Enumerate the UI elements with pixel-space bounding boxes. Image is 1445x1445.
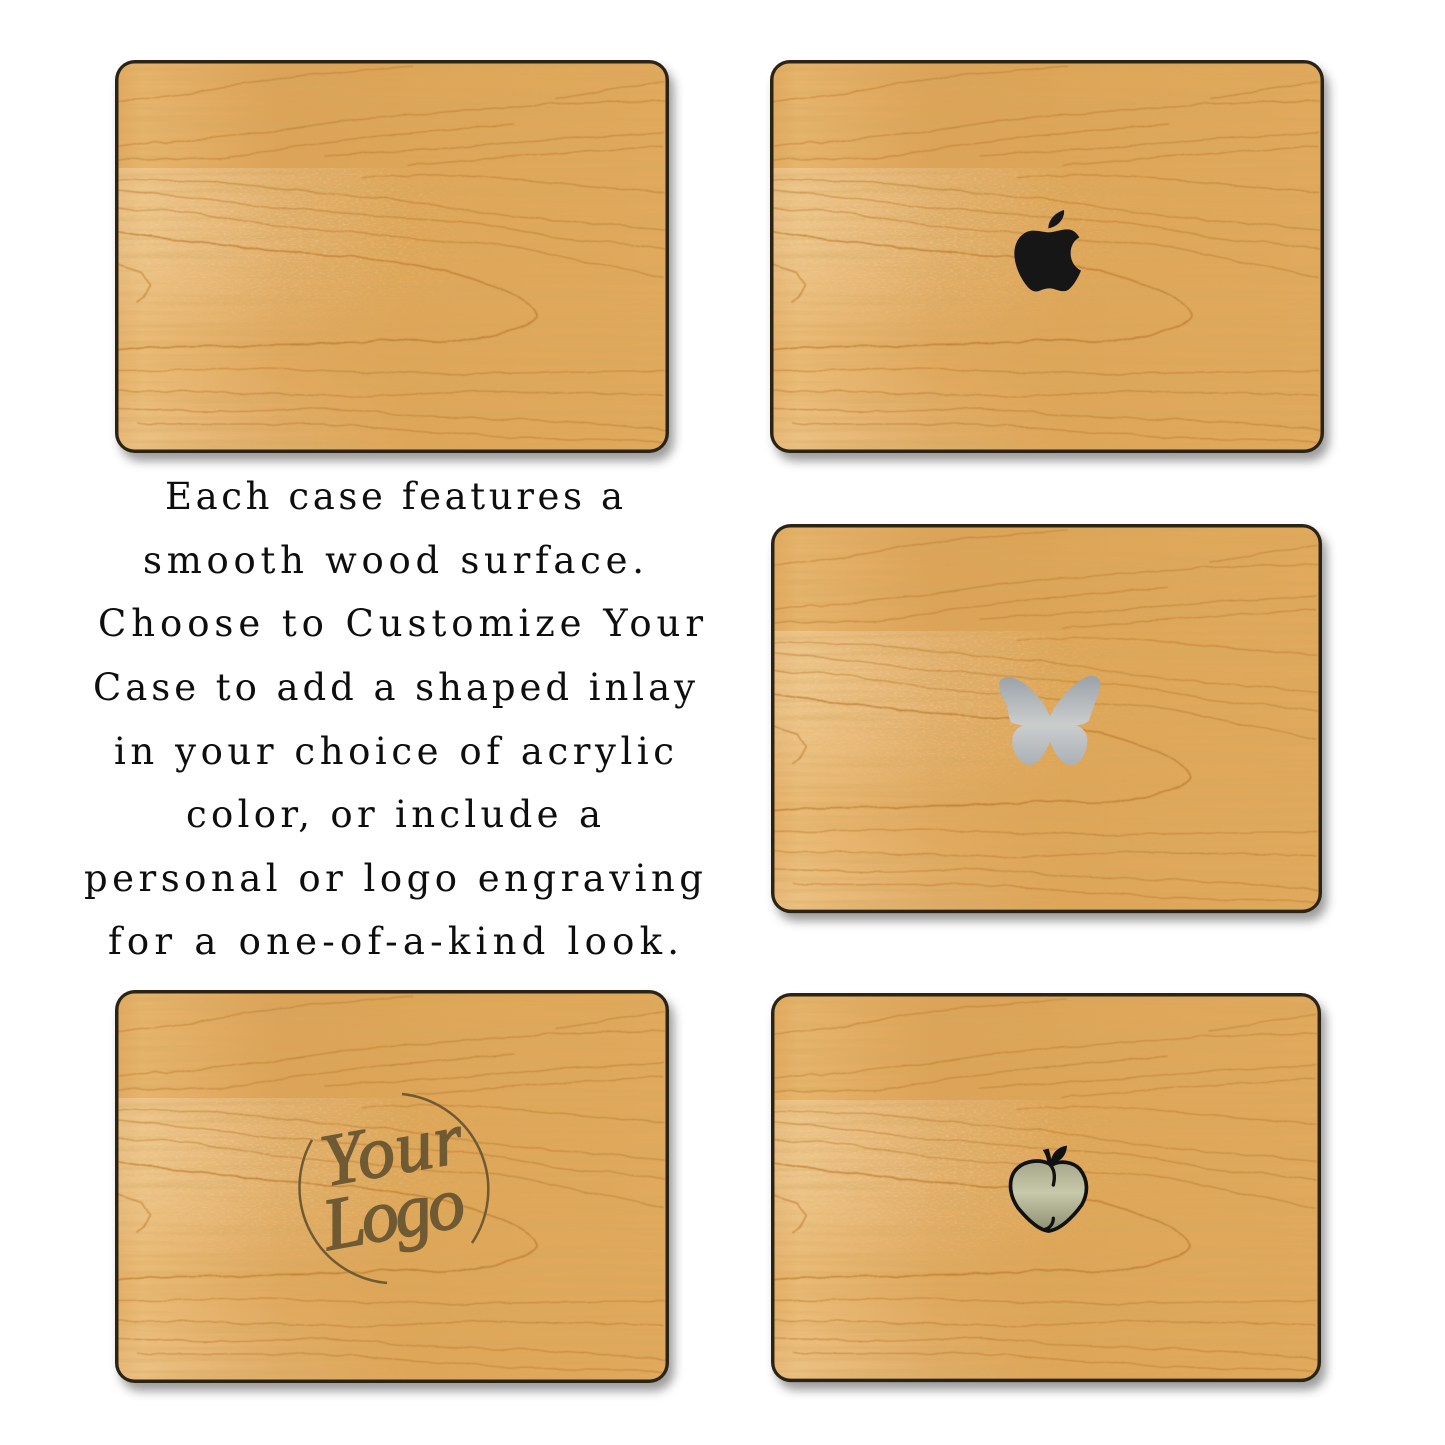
text block: description: smooth wood surface.	[143, 539, 644, 582]
text block: description: for a one-of-a-kind look.	[108, 920, 679, 963]
icon: gold peach inlay	[1011, 1146, 1086, 1231]
text block: description: personal or logo engraving	[84, 857, 703, 900]
icon: your logo engraving: Logo	[316, 1161, 471, 1267]
text block: description	[84, 475, 703, 963]
text block: description: color, or include a	[186, 793, 601, 836]
icon: your logo engraving	[299, 1094, 488, 1283]
icon: your logo engraving: Your	[315, 1097, 470, 1203]
panel: wood case with engraved logo	[115, 990, 674, 1391]
icon: black apple inlay	[1014, 210, 1081, 291]
panel: wood case with silver butterfly inlay	[771, 524, 1327, 921]
panel: wood case with black apple inlay	[770, 60, 1329, 461]
text block: description: Each case features a	[165, 475, 623, 518]
text block: description: Case to add a shaped inlay	[93, 666, 695, 709]
panel: plain wood case	[115, 60, 674, 461]
text block: description: in your choice of acrylic	[114, 730, 674, 773]
icon: silver butterfly inlay	[999, 676, 1101, 765]
text block: description: Choose to Customize Your	[98, 602, 703, 645]
panel: wood case with gold peach inlay	[771, 993, 1326, 1390]
